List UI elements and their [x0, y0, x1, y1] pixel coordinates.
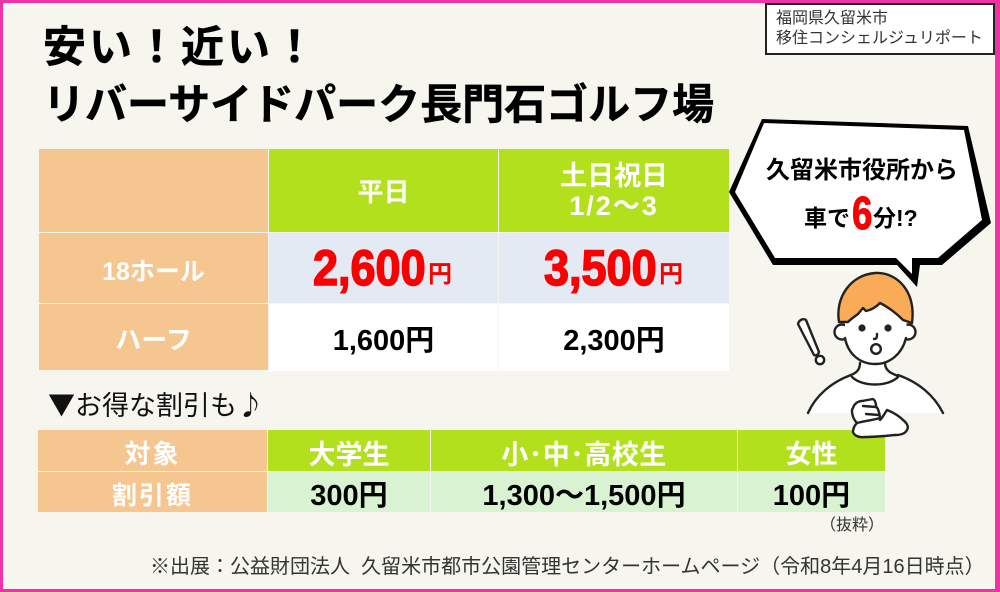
discount: school students: [431, 472, 737, 512]
speech bubble: [729, 119, 991, 287]
discount: university students: 300円: [310, 480, 388, 512]
discount: women: 100円: [773, 480, 850, 512]
discount: women: [738, 472, 885, 512]
row label: 18 holes: [39, 233, 268, 303]
row label: half round: ハーフ: [115, 324, 192, 354]
head: [845, 310, 907, 364]
header: target: [38, 430, 267, 471]
row label: discount amount: 割引額: [112, 482, 193, 510]
body: [808, 375, 943, 413]
discount: university students: [268, 472, 430, 512]
row label: half round: [39, 304, 268, 370]
speech bubble: 久留米市役所から: [766, 157, 958, 184]
header: school students: 小･中･高校生: [501, 440, 667, 470]
discount: school students: 1,300～1,500円: [482, 480, 686, 512]
source note: ※出展：公益財団法人 久留米市都市公園管理センターホームページ（令和8年4月16日時点）: [150, 556, 985, 578]
row label: discount amount: [38, 472, 267, 512]
discount table: [38, 430, 885, 512]
table corner cell: [39, 149, 268, 232]
header: weekdays: 平日: [357, 177, 410, 207]
header: weekends and holidays: [499, 149, 729, 232]
price: 18 holes weekday: [269, 233, 498, 303]
exclamation mark: [798, 319, 819, 355]
title: 安い！近い！: [43, 24, 319, 72]
price: half weekend: [499, 304, 729, 371]
discount subheading: ▼お得な割引も♪: [48, 384, 264, 423]
report label box: [765, 3, 995, 55]
price: 18 holes weekday: 円: [428, 261, 452, 288]
price: 18 holes weekend: 3,500: [544, 240, 657, 296]
speech bubble: 分!?: [873, 205, 918, 231]
mouth: [871, 344, 881, 354]
price: 18 holes weekend: [499, 233, 729, 303]
nose: [874, 334, 877, 339]
header: university students: 大学生: [308, 440, 390, 470]
header: university students: [268, 430, 430, 471]
header: weekdays: [269, 149, 498, 232]
illustration: surprised person: [796, 272, 944, 438]
header: weekends and holidays: 1/2～3: [569, 190, 659, 220]
header: school students: [431, 430, 737, 471]
row label: 18 holes: 18ホール: [102, 258, 205, 286]
report label box: 福岡県久留米市: [776, 10, 888, 27]
speech bubble: 6: [852, 187, 872, 239]
hand: [852, 399, 908, 437]
pricing table: [39, 149, 729, 371]
title: リバーサイドパーク長門石ゴルフ場: [43, 81, 714, 128]
report label box: 移住コンシェルジュリポート: [776, 30, 983, 47]
header: weekends and holidays: 土日祝日: [560, 160, 668, 190]
header: target: 対象: [124, 438, 180, 468]
speech bubble: 車で: [804, 205, 850, 231]
price: half weekday: [269, 304, 498, 371]
price: half weekday: 1,600円: [333, 324, 434, 356]
excerpt note: （抜粋）: [820, 517, 884, 534]
price: half weekend: 2,300円: [563, 324, 665, 356]
ears: [834, 324, 850, 340]
price: 18 holes weekend: 円: [659, 261, 683, 288]
title: [43, 24, 714, 128]
neck: [860, 356, 885, 380]
eyes: [858, 324, 892, 332]
header: women: [738, 430, 885, 471]
hair: [838, 273, 913, 323]
header: women: 女性: [785, 438, 838, 468]
price: 18 holes weekday: 2,600: [313, 240, 426, 296]
